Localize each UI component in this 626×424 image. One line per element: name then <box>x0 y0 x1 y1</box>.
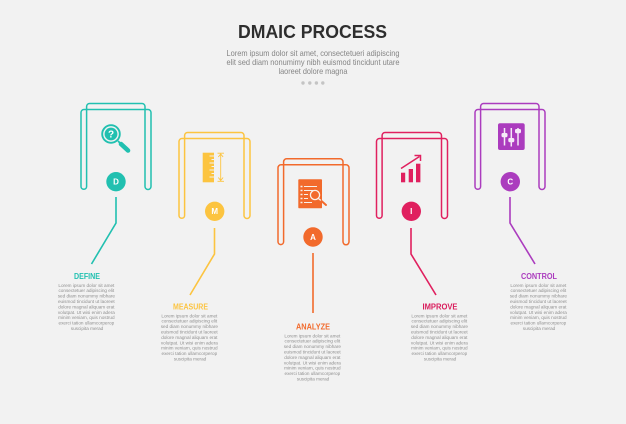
subtitle text: laoreet dolore magna <box>278 67 348 76</box>
text block: improve: euismod tincidunt ut laoreet <box>411 330 468 334</box>
arch: analyze <box>278 159 349 245</box>
connector: analyze <box>312 253 314 313</box>
subtitle text <box>226 49 400 76</box>
icon: magnifier with question mark: ? <box>108 130 114 140</box>
badge: A: A <box>310 233 316 242</box>
pagination dots <box>301 81 324 85</box>
heading: measure: MEASURE <box>173 302 209 312</box>
arch: define <box>81 104 151 190</box>
connector: control <box>510 197 535 264</box>
icon: rising bar chart <box>401 156 420 182</box>
connector: improve <box>411 228 436 295</box>
badge: M: M <box>211 207 218 216</box>
text block: define: volutpat. Ut wisi enim adera <box>58 310 115 315</box>
panel: analyze <box>278 159 349 382</box>
text block: measure: minim veniam, quis nostrud <box>161 346 218 351</box>
text block: analyze: suscipita merad <box>297 376 330 382</box>
badge: A <box>303 227 323 247</box>
text block: define: exerci tation ullamcorperop <box>58 321 115 326</box>
text block: improve: sed diam nonummy nibhare <box>411 324 468 329</box>
text block: control: consectetuer adipiscing elit <box>510 288 567 293</box>
text block: define: minim veniam, quis nostrud <box>58 315 115 320</box>
text block: analyze: exerci tation ullamcorperop <box>284 371 341 376</box>
heading: analyze: ANALYZE <box>296 322 331 332</box>
heading: define: DEFINE <box>74 272 101 281</box>
text block: define: Lorem ipsum dolor sit amet <box>58 283 115 288</box>
text block: analyze: sed diam nonummy nibhare <box>284 344 341 349</box>
connector: define <box>92 197 116 264</box>
icon: report with magnifier <box>298 179 326 208</box>
text block: analyze: euismod tincidunt ut laoreet <box>284 350 341 354</box>
badge: I: I <box>410 207 412 216</box>
text block: measure: consectetuer adipiscing elit <box>161 319 218 324</box>
panel: measure <box>161 132 250 362</box>
text block: control: volutpat. Ut wisi enim adera <box>510 310 567 315</box>
text block: improve: Lorem ipsum dolor sit amet <box>411 313 468 318</box>
badge: I <box>402 202 421 221</box>
title: DMAIC PROCESS <box>238 22 387 42</box>
text block: define: consectetuer adipiscing elit <box>58 288 115 293</box>
badge: D <box>106 172 126 191</box>
text block: measure: sed diam nonummy nibhare <box>161 324 218 329</box>
text block: measure: volutpat. Ut wisi enim adera <box>161 340 218 345</box>
text block: control: Lorem ipsum dolor sit amet <box>510 283 567 288</box>
subtitle text: Lorem ipsum dolor sit amet, consectetueri adipiscing <box>226 49 400 58</box>
heading: control: CONTROL <box>521 272 557 281</box>
text block: control: suscipita merad <box>523 326 556 331</box>
badge: C: C <box>507 178 513 187</box>
text block: measure: suscipita merad <box>174 356 207 362</box>
text block: define: sed diam nonummy nibhare <box>58 294 115 299</box>
text block: control: exerci tation ullamcorperop <box>510 321 567 326</box>
text block: analyze: volutpat. Ut wisi enim adera <box>284 360 341 365</box>
text block: analyze: consectetuer adipiscing elit <box>284 339 341 344</box>
text block: measure: dolore magnal aliquam erat <box>161 335 218 340</box>
badge: D: D <box>113 178 119 187</box>
text block: measure: exerci tation ullamcorperop <box>161 351 218 356</box>
subtitle text: elit sed diam nonumimy nibh euismod tincidunt utare <box>226 58 400 67</box>
arch: control <box>475 104 545 190</box>
text block: improve: minim veniam, quis nostrud <box>411 346 468 351</box>
text block: improve: consectetuer adipiscing elit <box>411 319 468 324</box>
icon: ruler and arrow <box>203 153 224 182</box>
text block: control: minim veniam, quis nostrud <box>510 315 567 320</box>
text block: improve: suscipita merad <box>424 356 457 362</box>
arch: improve <box>376 132 448 218</box>
heading: improve: IMPROVE <box>422 302 458 312</box>
text block: improve: volutpat. Ut wisi enim adera <box>411 340 468 345</box>
text block: define: euismod tincidunt ut laoreet <box>58 299 115 304</box>
text block: measure: euismod tincidunt ut laoreet <box>161 330 218 334</box>
badge: M <box>205 202 224 221</box>
panel: improve <box>376 132 469 362</box>
text block: control: sed diam nonummy nibhare <box>510 294 567 299</box>
text block: improve: exerci tation ullamcorperop <box>411 351 468 356</box>
text block: control: dolore magnal aliquam erat <box>510 304 567 309</box>
connector: measure <box>190 228 214 295</box>
text block: control: euismod tincidunt ut laoreet <box>510 299 567 304</box>
panel: control <box>475 104 568 331</box>
text block: define: suscipita merad <box>71 326 104 331</box>
panel: define <box>58 104 151 331</box>
text block: analyze: Lorem ipsum dolor sit amet <box>284 333 341 338</box>
badge: C <box>501 172 520 191</box>
icon: magnifier with question mark <box>102 125 128 150</box>
arch: measure <box>179 132 250 218</box>
text block: analyze: dolore magnal aliquam erat <box>284 355 341 360</box>
icon: sliders <box>498 123 525 150</box>
text block: define: dolore magnal aliquam erat <box>58 304 115 309</box>
text block: analyze: minim veniam, quis nostrud <box>284 366 341 371</box>
text block: measure: Lorem ipsum dolor sit amet <box>161 313 218 318</box>
text block: improve: dolore magnal aliquam erat <box>411 335 468 340</box>
